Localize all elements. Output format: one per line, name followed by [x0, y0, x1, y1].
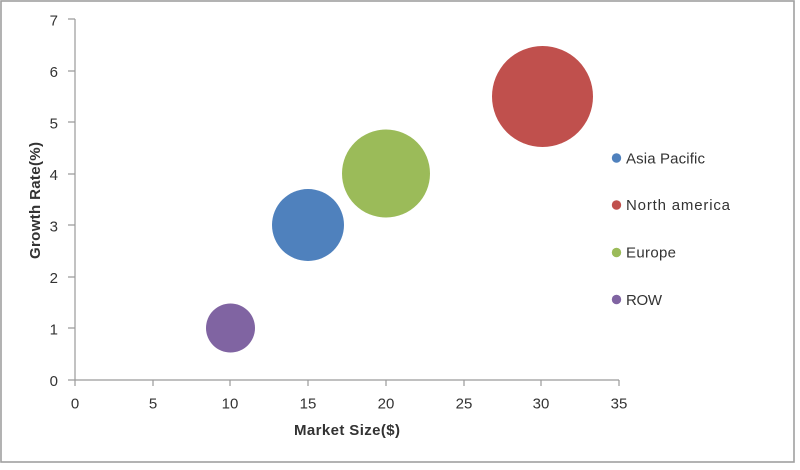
bubble: Europe: [342, 130, 430, 218]
x axis: 5: [149, 396, 157, 412]
y axis: 2: [50, 270, 58, 287]
legend: Europe: [626, 244, 676, 262]
legend: ROW: [626, 292, 663, 309]
legend: Asia Pacific: [626, 150, 706, 168]
legend: [612, 150, 731, 309]
bubble: North america: [492, 46, 593, 147]
y axis: 3: [50, 218, 58, 236]
bubble: Asia Pacific: [272, 189, 344, 261]
legend: North america: [626, 197, 731, 214]
x axis title: Market Size($): [294, 422, 400, 439]
x axis: 25: [456, 396, 472, 412]
x axis: [71, 380, 627, 412]
y axis: [50, 12, 75, 390]
bubble: ROW: [206, 304, 255, 352]
y axis: 0: [50, 373, 58, 390]
y axis: 7: [50, 12, 58, 30]
y axis: 6: [50, 64, 58, 81]
x axis: 20: [378, 396, 394, 412]
y axis: 5: [50, 116, 58, 132]
y axis: 4: [50, 167, 58, 184]
x axis: 10: [222, 396, 238, 412]
x axis: 35: [611, 396, 627, 412]
x axis: 30: [533, 396, 549, 412]
x axis: 15: [300, 396, 316, 412]
x axis: 0: [71, 396, 79, 412]
y axis title: Growth Rate(%): [27, 142, 44, 259]
y axis: 1: [50, 322, 58, 338]
